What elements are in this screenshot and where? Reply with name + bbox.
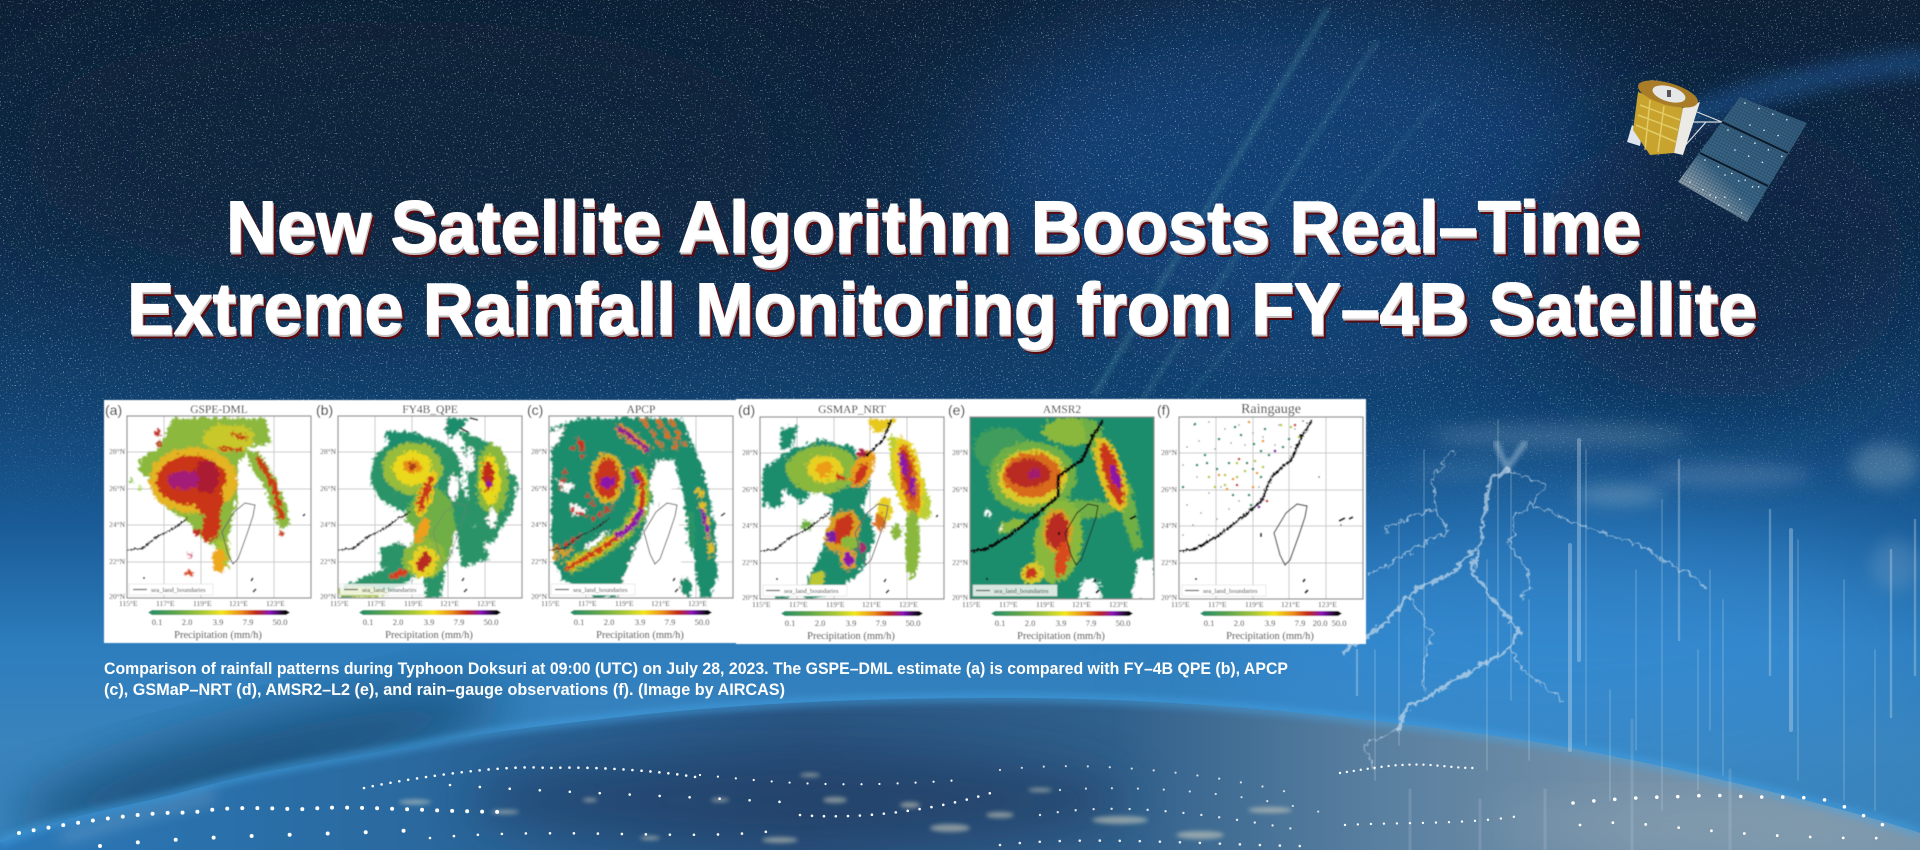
map (e) AMSR2: 3.9 xyxy=(1056,618,1066,628)
map (f) Raingauge: Raingauge xyxy=(1241,402,1301,417)
map (d) GSMAP_NRT: 7.9 xyxy=(876,618,886,628)
map (c) APCP: 119°E xyxy=(615,599,634,608)
map (e) AMSR2: 24°N xyxy=(952,521,969,530)
map (a) GSPE-DML: 119°E xyxy=(193,599,212,608)
map (c) APCP: 24°N xyxy=(531,520,548,529)
map (e) AMSR2: (e) xyxy=(948,402,965,418)
map (f) Raingauge: 121°E xyxy=(1281,600,1300,609)
map (f) Raingauge: 22°N xyxy=(1161,558,1178,567)
map (f) Raingauge: 3.9 xyxy=(1265,618,1275,628)
caption xyxy=(104,660,1288,699)
map (e) AMSR2: 26°N xyxy=(952,485,969,494)
icon: solar panel array xyxy=(1678,97,1807,222)
map (e) AMSR2: 115°E xyxy=(962,600,981,609)
map (e) AMSR2: 22°N xyxy=(952,558,969,567)
map (f) Raingauge: 123°E xyxy=(1318,600,1337,609)
map (b) FY4B_QPE: (b) xyxy=(316,402,333,418)
title: New Satellite Algorithm Boosts Real–Time xyxy=(226,187,1641,268)
title xyxy=(127,187,1757,350)
map (e) AMSR2: 50.0 xyxy=(1116,618,1130,628)
map (d) GSMAP_NRT: 121°E xyxy=(862,600,881,609)
map (d) GSMAP_NRT: 24°N xyxy=(742,521,759,530)
map (b) FY4B_QPE: 22°N xyxy=(320,557,337,566)
map (b) FY4B_QPE: 117°E xyxy=(367,599,386,608)
map (e) AMSR2: 20°N xyxy=(952,593,969,602)
map (d) GSMAP_NRT: 26°N xyxy=(742,485,759,494)
map (f) Raingauge: 28°N xyxy=(1161,448,1178,457)
map (f) Raingauge: 119°E xyxy=(1245,600,1264,609)
caption: (c), GSMaP–NRT (d), AMSR2–L2 (e), and rain–gauge observations (f). (Image by AIRCAS) xyxy=(104,681,785,699)
map (a) GSPE-DML: 0.1 xyxy=(152,617,162,627)
map (a) GSPE-DML: 123°E xyxy=(266,599,285,608)
map (a) GSPE-DML xyxy=(105,402,311,641)
map (a) GSPE-DML: 22°N xyxy=(109,557,126,566)
map (e) AMSR2: 28°N xyxy=(952,448,969,457)
map (a) GSPE-DML: 115°E xyxy=(119,599,138,608)
map (d) GSMAP_NRT: 3.9 xyxy=(846,618,856,628)
map (b) FY4B_QPE: 123°E xyxy=(477,599,496,608)
map (a) GSPE-DML: 26°N xyxy=(109,484,126,493)
map (b) FY4B_QPE: 26°N xyxy=(320,484,337,493)
map (f) Raingauge: 20°N xyxy=(1161,593,1178,602)
map (b) FY4B_QPE: FY4B_QPE xyxy=(402,404,458,416)
legend: sea_land_boundaries xyxy=(1203,588,1258,595)
map (d) GSMAP_NRT: Precipitation (mm/h) xyxy=(807,631,895,642)
map (b) FY4B_QPE: 7.9 xyxy=(454,617,464,627)
map (a) GSPE-DML: 121°E xyxy=(229,599,248,608)
map (d) GSMAP_NRT: 2.0 xyxy=(815,618,825,628)
map (a) GSPE-DML: 3.9 xyxy=(213,617,223,627)
legend xyxy=(551,584,635,595)
legend: sea_land_boundaries xyxy=(573,587,628,594)
map (e) AMSR2: 117°E xyxy=(999,600,1018,609)
map (d) GSMAP_NRT: 20°N xyxy=(742,593,759,602)
map (a) GSPE-DML: 50.0 xyxy=(273,617,287,627)
map (c) APCP: 26°N xyxy=(531,484,548,493)
map (a) GSPE-DML: 24°N xyxy=(109,520,126,529)
map (b) FY4B_QPE: 24°N xyxy=(320,520,337,529)
map (d) GSMAP_NRT: 0.1 xyxy=(785,618,795,628)
map (d) GSMAP_NRT: GSMAP_NRT xyxy=(818,404,886,416)
map (b) FY4B_QPE: 50.0 xyxy=(484,617,498,627)
map (b) FY4B_QPE: 3.9 xyxy=(424,617,434,627)
background: clouds xyxy=(1410,424,1919,591)
map (c) APCP xyxy=(527,402,733,641)
map (a) GSPE-DML: 28°N xyxy=(109,447,126,456)
map (f) Raingauge: 24°N xyxy=(1161,521,1178,530)
map (a) GSPE-DML: 7.9 xyxy=(243,617,253,627)
map (c) APCP: 20°N xyxy=(531,592,548,601)
map (c) APCP: 3.9 xyxy=(635,617,645,627)
map (c) APCP: 7.9 xyxy=(665,617,675,627)
map (f) Raingauge: (f) xyxy=(1157,402,1170,418)
map (f) Raingauge: 2.0 xyxy=(1234,618,1244,628)
map (f) Raingauge: 26°N xyxy=(1161,485,1178,494)
map (b) FY4B_QPE: 20°N xyxy=(320,592,337,601)
caption: Comparison of rainfall patterns during Typhoon Doksuri at 09:00 (UTC) on July 28, 2023. The GSPE–DML estimate (a) is compared with FY–4B QPE (b), APCP xyxy=(104,660,1288,678)
map (a) GSPE-DML: 20°N xyxy=(109,592,126,601)
map (b) FY4B_QPE: 115°E xyxy=(330,599,349,608)
map (f) Raingauge: 117°E xyxy=(1208,600,1227,609)
map (e) AMSR2: Precipitation (mm/h) xyxy=(1017,631,1105,642)
background: rain streaks xyxy=(1357,420,1915,850)
map (e) AMSR2: 0.1 xyxy=(995,618,1005,628)
map (f) Raingauge: 115°E xyxy=(1171,600,1190,609)
map (e) AMSR2: 7.9 xyxy=(1086,618,1096,628)
map (f) Raingauge: 20.0 xyxy=(1313,618,1327,628)
map (a) GSPE-DML: Precipitation (mm/h) xyxy=(174,630,262,641)
map (d) GSMAP_NRT: 115°E xyxy=(752,600,771,609)
map (b) FY4B_QPE: Precipitation (mm/h) xyxy=(385,630,473,641)
city lights xyxy=(19,765,1900,846)
map (f) Raingauge: 7.9 xyxy=(1295,618,1305,628)
map (b) FY4B_QPE: 2.0 xyxy=(393,617,403,627)
map (c) APCP: 0.1 xyxy=(574,617,584,627)
satellite xyxy=(1627,75,1807,222)
map (e) AMSR2: 121°E xyxy=(1072,600,1091,609)
map (e) AMSR2 xyxy=(948,402,1154,642)
map (c) APCP: (c) xyxy=(527,402,543,418)
map (a) GSPE-DML: 2.0 xyxy=(182,617,192,627)
legend xyxy=(129,584,213,595)
map (b) FY4B_QPE: 0.1 xyxy=(363,617,373,627)
map (c) APCP: Precipitation (mm/h) xyxy=(596,630,684,641)
map (a) GSPE-DML: (a) xyxy=(105,402,122,418)
map (c) APCP: 22°N xyxy=(531,557,548,566)
map (e) AMSR2: 119°E xyxy=(1036,600,1055,609)
map (d) GSMAP_NRT: 123°E xyxy=(899,600,918,609)
map (b) FY4B_QPE xyxy=(316,402,522,641)
map (f) Raingauge: 50.0 xyxy=(1332,618,1346,628)
map (c) APCP: 50.0 xyxy=(695,617,709,627)
map (e) AMSR2: AMSR2 xyxy=(1043,404,1081,416)
map (d) GSMAP_NRT: 117°E xyxy=(789,600,808,609)
map (b) FY4B_QPE: 119°E xyxy=(404,599,423,608)
background: earth limb xyxy=(0,690,1920,850)
map (d) GSMAP_NRT: (d) xyxy=(738,402,755,418)
map (c) APCP: 121°E xyxy=(651,599,670,608)
map (d) GSMAP_NRT: 50.0 xyxy=(906,618,920,628)
map (f) Raingauge: Precipitation (mm/h) xyxy=(1226,631,1314,642)
panel: rainfall comparison figure xyxy=(104,399,1366,644)
title: Extreme Rainfall Monitoring from FY–4B Satellite xyxy=(127,269,1757,350)
map (d) GSMAP_NRT: 22°N xyxy=(742,558,759,567)
legend xyxy=(340,584,424,595)
background: light streaks xyxy=(1095,10,1920,397)
map (c) APCP: 123°E xyxy=(688,599,707,608)
map (d) GSMAP_NRT: 28°N xyxy=(742,448,759,457)
map (a) GSPE-DML: GSPE-DML xyxy=(190,404,248,416)
lightning bolts xyxy=(1340,443,1703,767)
legend xyxy=(973,585,1057,596)
map (f) Raingauge xyxy=(1157,402,1363,642)
map (c) APCP: 2.0 xyxy=(604,617,614,627)
map (c) APCP: 115°E xyxy=(541,599,560,608)
map (d) GSMAP_NRT: 119°E xyxy=(826,600,845,609)
map (c) APCP: 117°E xyxy=(578,599,597,608)
map (f) Raingauge: 0.1 xyxy=(1204,618,1214,628)
map (e) AMSR2: 2.0 xyxy=(1025,618,1035,628)
map (b) FY4B_QPE: 28°N xyxy=(320,447,337,456)
map (c) APCP: APCP xyxy=(627,404,655,416)
legend: sea_land_boundaries xyxy=(784,588,839,595)
icon: satellite body xyxy=(1627,75,1701,155)
map (c) APCP: 28°N xyxy=(531,447,548,456)
map (d) GSMAP_NRT xyxy=(738,402,944,642)
legend xyxy=(763,585,847,596)
map (b) FY4B_QPE: 121°E xyxy=(440,599,459,608)
legend: sea_land_boundaries xyxy=(362,587,417,594)
map (a) GSPE-DML: 117°E xyxy=(156,599,175,608)
map (e) AMSR2: 123°E xyxy=(1109,600,1128,609)
legend: sea_land_boundaries xyxy=(151,587,206,594)
legend xyxy=(1182,585,1266,596)
legend: sea_land_boundaries xyxy=(994,588,1049,595)
